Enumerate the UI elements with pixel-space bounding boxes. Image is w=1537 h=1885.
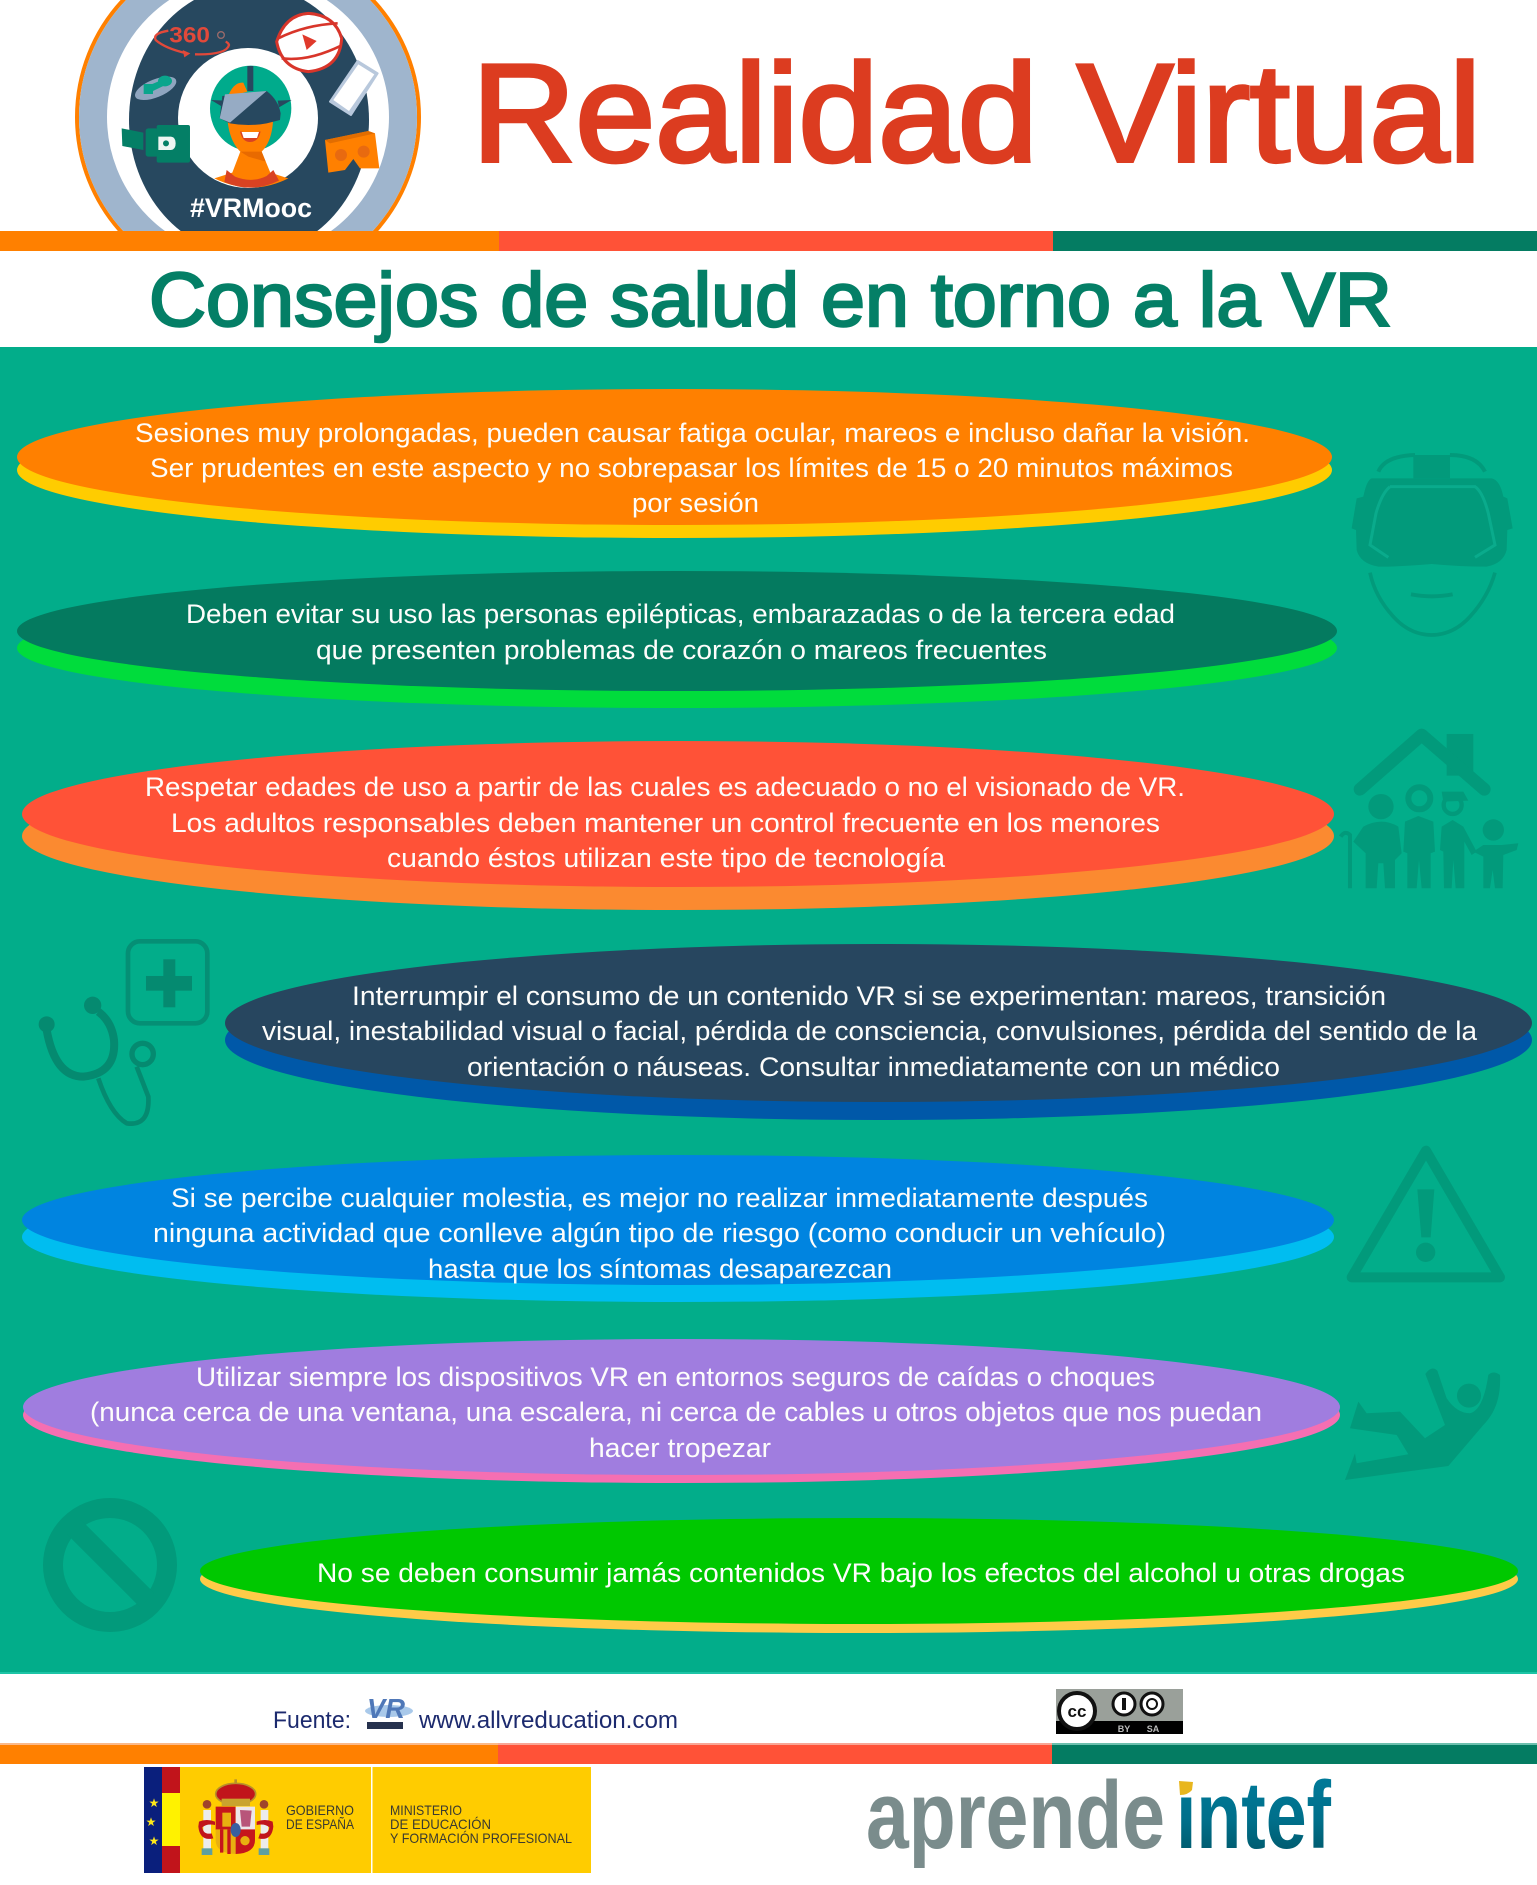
advice 1: orange ellipse: Ser prudentes en este aspecto y no sobrepasar los límites de 15 o 20 minutos máximos bbox=[150, 453, 1233, 483]
advice 5: blue ellipse: Si se percibe cualquier molestia, es mejor no realizar inmediatamente después bbox=[171, 1183, 1148, 1213]
advice 4: navy ellipse bbox=[225, 944, 1532, 1120]
logo: Gobierno de España: ★ bbox=[149, 1796, 159, 1810]
advice 4: navy ellipse: orientación o náuseas. Consultar inmediatamente con un médico bbox=[467, 1052, 1280, 1082]
advice 2: dark green ellipse: Deben evitar su uso las personas epilépticas, embarazadas o de la tercera edad bbox=[186, 599, 1175, 629]
source credit bbox=[273, 1693, 678, 1734]
logo icon: smartphone bbox=[330, 61, 378, 115]
title: Realidad Virtual bbox=[472, 36, 1481, 191]
logo: Gobierno de España: GOBIERNO bbox=[286, 1802, 354, 1818]
advice 6: purple ellipse: hacer tropezar bbox=[589, 1433, 771, 1463]
logo hashtag: #VRMooc bbox=[190, 193, 312, 223]
logo icon: camera bbox=[122, 125, 190, 163]
advice 6: purple ellipse: (nunca cerca de una ventana, una escalera, ni cerca de cables u otros objetos que nos puedan bbox=[90, 1397, 1262, 1427]
advice 5: blue ellipse: ninguna actividad que conlleve algún tipo de riesgo (como conducir un vehículo) bbox=[153, 1218, 1166, 1248]
licence badge: CC BY SA: BY bbox=[1118, 1724, 1130, 1734]
advice 6: purple ellipse bbox=[23, 1339, 1340, 1483]
icon: warning triangle bbox=[1352, 1151, 1500, 1277]
advice 5: blue ellipse: hasta que los síntomas desaparezcan bbox=[428, 1254, 892, 1284]
advice 6: purple ellipse: Utilizar siempre los dispositivos VR en entornos seguros de caídas o choques bbox=[196, 1362, 1155, 1392]
logo icon: video play bbox=[277, 13, 342, 72]
main teal panel bbox=[0, 347, 1537, 1673]
advice 1: orange ellipse: por sesión bbox=[632, 488, 759, 518]
header logo: #VRMooc badge bbox=[75, 0, 421, 231]
advice 7: green ellipse: No se deben consumir jamás contenidos VR bajo los efectos del alcohol u otras drogas bbox=[317, 1558, 1405, 1588]
logo icon: 360: 360 bbox=[169, 23, 210, 48]
advice 4: navy ellipse: visual, inestabilidad visual o facial, pérdida de consciencia, convulsiones, pérdida del sentido de la bbox=[262, 1016, 1478, 1046]
logo: Gobierno de España: DE ESPAÑA bbox=[286, 1816, 355, 1832]
advice 2: dark green ellipse bbox=[17, 571, 1337, 708]
bottom colour bar bbox=[0, 1743, 1537, 1764]
licence badge: CC BY SA: cc bbox=[1068, 1702, 1086, 1721]
logo: Gobierno de España: Y FORMACIÓN PROFESIONAL bbox=[390, 1830, 572, 1846]
advice 4: navy ellipse: Interrumpir el consumo de un contenido VR si se experimentan: mareos, transición bbox=[352, 981, 1386, 1011]
logo icon: 360 bbox=[155, 23, 229, 57]
top colour bar bbox=[0, 231, 1537, 251]
icon: falling person bbox=[1345, 1368, 1500, 1480]
logo: Gobierno de España: MINISTERIO bbox=[390, 1802, 462, 1818]
advice 3: red ellipse: Respetar edades de uso a partir de las cuales es adecuado o no el visionado de VR. bbox=[145, 772, 1185, 802]
icon: prohibition sign bbox=[53, 1508, 167, 1622]
logo: aprende intef: aprende bbox=[866, 1762, 1165, 1869]
advice 1: orange ellipse bbox=[17, 389, 1332, 538]
logo figure: person with VR headset bbox=[210, 66, 292, 188]
icon: allvreducation logo bbox=[365, 1693, 413, 1729]
icon: family under roof bbox=[1341, 734, 1518, 888]
advice 7: green ellipse bbox=[200, 1518, 1518, 1633]
logo: Gobierno de España: DE EDUCACIÓN bbox=[390, 1816, 491, 1832]
source credit: Fuente: bbox=[273, 1707, 351, 1734]
icon: stethoscope and medical cross bbox=[39, 941, 207, 1124]
advice 3: red ellipse bbox=[22, 741, 1334, 910]
advice 5: blue ellipse bbox=[22, 1155, 1334, 1302]
subtitle: Consejos de salud en torno a la VR bbox=[149, 258, 1392, 343]
logo icon: controller bbox=[135, 76, 176, 100]
advice 1: orange ellipse: Sesiones muy prolongadas, pueden causar fatiga ocular, mareos e incluso dañar la visión. bbox=[135, 418, 1250, 448]
advice 3: red ellipse: Los adultos responsables deben mantener un control frecuente en los menores bbox=[171, 808, 1160, 838]
advice 3: red ellipse: cuando éstos utilizan este tipo de tecnología bbox=[387, 843, 946, 873]
icon: allvreducation logo: VR bbox=[367, 1693, 406, 1724]
licence badge: CC BY SA: SA bbox=[1147, 1724, 1160, 1734]
logo icon: cardboard viewer bbox=[325, 131, 379, 173]
advice 2: dark green ellipse: que presenten problemas de corazón o mareos frecuentes bbox=[316, 635, 1047, 665]
icon: VR headset face bbox=[1352, 455, 1513, 635]
logo: Gobierno de España: ★ bbox=[149, 1834, 159, 1848]
licence badge: CC BY SA bbox=[1056, 1689, 1183, 1734]
logo: Gobierno de España: ★ bbox=[146, 1815, 156, 1829]
logo: Gobierno de España bbox=[144, 1767, 591, 1873]
logo: aprende intef: ıntef bbox=[1176, 1762, 1332, 1869]
icon: coat of arms bbox=[198, 1779, 273, 1855]
source credit: www.allvreducation.com bbox=[418, 1707, 678, 1734]
